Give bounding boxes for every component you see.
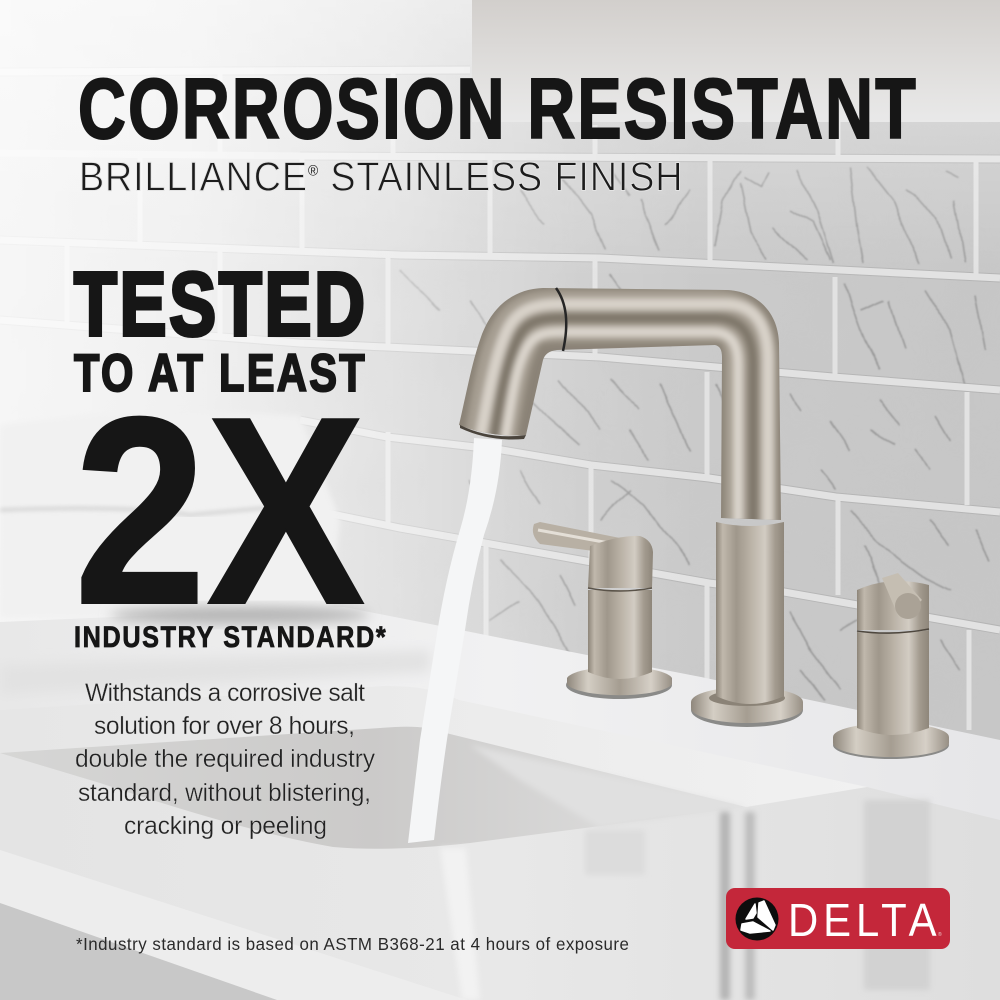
spout seam bbox=[556, 288, 566, 351]
left lever handle bbox=[533, 522, 672, 699]
folded towels at left bbox=[0, 412, 340, 618]
brand wordmark: DELTA bbox=[788, 895, 937, 947]
subtitle: STAINLESS FINISH bbox=[319, 154, 683, 200]
sink rim bbox=[0, 686, 867, 807]
description text: solution for over 8 hours, bbox=[94, 713, 355, 740]
headline: industry standard: INDUSTRY STANDARD* bbox=[74, 620, 386, 653]
faucet center column and base bbox=[691, 522, 803, 727]
title: CORROSION RESISTANT bbox=[78, 62, 916, 157]
running water stream bbox=[408, 438, 502, 843]
Delta logo bbox=[726, 888, 950, 949]
headline: tested: TESTED bbox=[74, 255, 365, 355]
subtitle: ® bbox=[308, 163, 318, 180]
mirror at top right bbox=[472, 0, 1000, 122]
registered mark: ® bbox=[938, 931, 942, 938]
footnote: *Industry standard is based on ASTM B368-21 at 4 hours of exposure bbox=[76, 934, 629, 954]
aerator opening bbox=[460, 425, 526, 440]
headline: to at least: TO AT LEAST bbox=[74, 344, 365, 403]
description text bbox=[75, 680, 376, 840]
description text: double the required industry bbox=[75, 746, 376, 773]
grout lines bbox=[0, 70, 1000, 730]
faucet spout bbox=[459, 287, 781, 520]
counter front bbox=[0, 753, 1000, 1000]
headline: 2X: 2X bbox=[74, 361, 365, 660]
description text: standard, without blistering, bbox=[78, 780, 371, 807]
icon: delta triangle mark bbox=[736, 898, 778, 940]
marble veins bbox=[400, 167, 990, 700]
vanity countertop bbox=[0, 606, 1000, 1000]
description text: cracking or peeling bbox=[124, 813, 327, 840]
sink basin bbox=[0, 727, 746, 849]
front edge strip bbox=[0, 850, 467, 1000]
cabinet below counter bbox=[0, 903, 277, 1000]
subtitle: BRILLIANCE bbox=[79, 154, 307, 200]
faucet reflections in counter bbox=[440, 800, 930, 1000]
description text: Withstands a corrosive salt bbox=[85, 680, 365, 707]
right lever handle bbox=[833, 573, 949, 759]
